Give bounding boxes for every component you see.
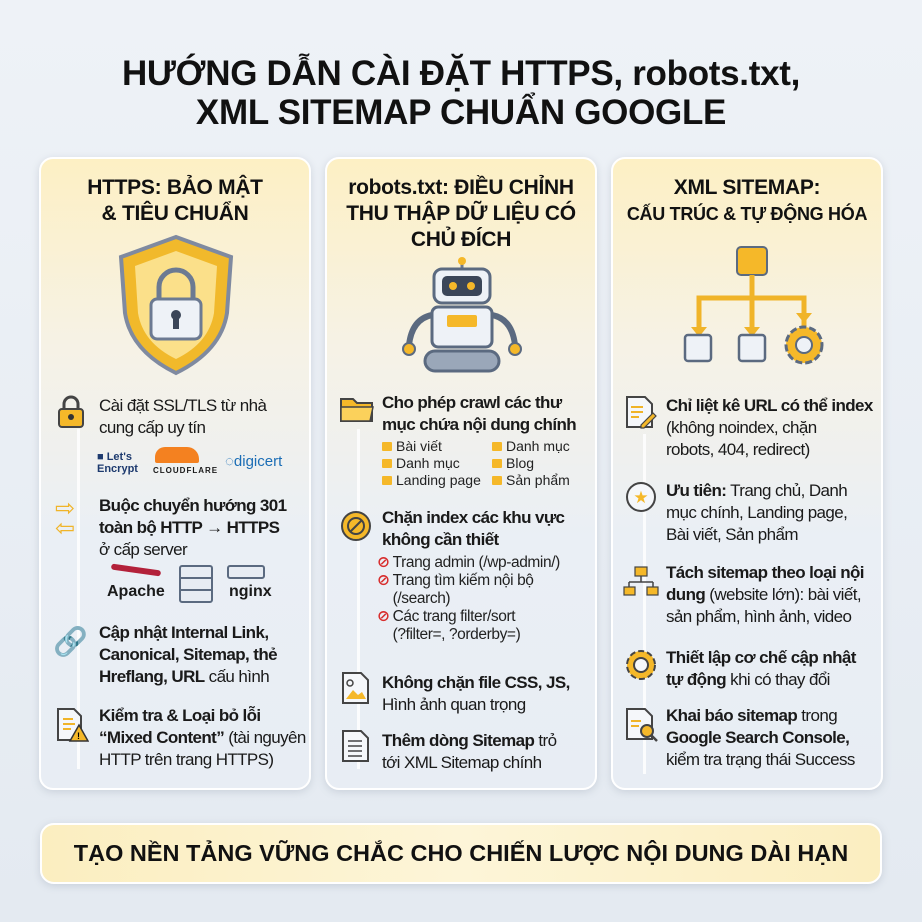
logos: servers: nginx — [229, 583, 272, 600]
text: allow crawl: mục chứa nội dung chính — [382, 415, 576, 434]
text: internal link: Canonical, Sitemap, thẻ — [99, 645, 277, 664]
icon: redirect arrows: ⇨ — [55, 495, 75, 522]
text: priority: Bài viết, Sản phẩm — [666, 525, 798, 544]
text: index urls — [666, 396, 874, 459]
text: index urls: Chỉ liệt kê URL có thể index — [666, 396, 873, 415]
text: redirect: ở cấp server — [99, 540, 187, 559]
icon: star — [626, 482, 656, 512]
title: HƯỚNG DẪN CÀI ĐẶT HTTPS, robots.txt, — [122, 54, 800, 93]
text: mixed content: HTTP trên trang HTTPS) — [99, 750, 273, 769]
banner: footer: TẠO NỀN TẢNG VỮNG CHẮC CHO CHIẾN LƯỢC NỘI DUNG DÀI HẠN — [74, 840, 848, 866]
text: index urls: (không noindex, chặn — [666, 418, 817, 437]
text: mixed content: “Mixed Content” (tài nguyên — [99, 728, 306, 747]
text: search console: Khai báo sitemap trong — [666, 706, 837, 725]
icon: doc warning: ! — [77, 731, 80, 741]
list: blocked: ⊘Trang tìm kiếm nội bộ — [377, 572, 534, 589]
text: redirect — [99, 496, 287, 559]
panel: https — [39, 157, 311, 790]
text: block index: Chặn index các khu vực — [382, 508, 564, 527]
icon: lock — [58, 396, 84, 428]
icon: block — [341, 511, 371, 541]
list: allowed folders — [382, 438, 570, 488]
heading: robots — [346, 174, 576, 251]
icon: gear — [626, 650, 656, 680]
logos: ssl providers: Encrypt — [97, 463, 138, 475]
icon: link: 🔗 — [53, 626, 88, 657]
heading: sitemap: XML SITEMAP: — [674, 176, 820, 199]
text: css js: Hình ảnh quan trọng — [382, 695, 526, 714]
text: search console: Google Search Console, — [666, 728, 849, 747]
text: split sitemap: Tách sitemap theo loại nội — [666, 563, 864, 582]
list: blocked: (?filter=, ?orderby=) — [393, 626, 520, 643]
heading: robots: CHỦ ĐÍCH — [411, 228, 511, 251]
heading: robots: THU THẬP DỮ LIỆU CÓ — [346, 202, 576, 225]
panel: robots: Blog — [506, 455, 534, 471]
icon: shield — [118, 234, 234, 376]
text: sitemap line: Thêm dòng Sitemap trỏ — [382, 731, 556, 750]
heading: robots: robots.txt: ĐIỀU CHỈNH — [348, 176, 574, 199]
icon: edit doc — [626, 396, 657, 429]
panel: sitemap — [611, 157, 883, 790]
logos: ssl providers: CLOUDFLARE — [153, 466, 218, 475]
text: auto update: Thiết lập cơ chế cập nhật — [666, 648, 856, 667]
heading: https: & TIÊU CHUẨN — [102, 202, 248, 225]
icon: folder — [340, 398, 374, 422]
panel: robots: Sản phẩm — [506, 472, 570, 488]
icon: star: ★ — [633, 488, 649, 507]
text: index urls: robots, 404, redirect) — [666, 440, 810, 459]
panel: robots: Landing page — [396, 472, 481, 488]
icon: image — [342, 672, 369, 704]
icon: hierarchy — [623, 566, 659, 596]
logos: servers: Apache — [107, 583, 165, 600]
text: redirect: toàn bộ HTTP → HTTPS — [99, 518, 279, 537]
icon: sitemap tree — [684, 246, 824, 364]
title: XML SITEMAP CHUẨN GOOGLE — [196, 93, 726, 132]
text: auto update: tự động khi có thay đổi — [666, 670, 830, 689]
heading: sitemap — [627, 176, 867, 224]
icon: doc warning — [57, 708, 89, 742]
logos: ssl providers — [97, 447, 282, 475]
icon: search doc — [626, 708, 658, 742]
list: blocked: ⊘Các trang filter/sort — [377, 608, 515, 625]
logos: ssl providers: ◌digicert — [225, 453, 282, 470]
text: sitemap line — [382, 731, 556, 772]
text: search console: kiểm tra trạng thái Success — [666, 750, 855, 769]
banner: footer — [40, 823, 882, 884]
text: sitemap line: tới XML Sitemap chính — [382, 753, 542, 772]
list: blocked — [377, 554, 560, 643]
panel: robots: Bài viết — [396, 438, 442, 454]
text: block index — [382, 508, 564, 549]
panel: robots — [325, 157, 597, 790]
text: allow crawl — [382, 393, 576, 434]
icon: list doc — [342, 730, 369, 762]
text: priority: Ưu tiên: Trang chủ, Danh — [666, 481, 847, 500]
list: blocked: ⊘Trang admin (/wp-admin/) — [377, 554, 560, 571]
text: split sitemap: dung (website lớn): bài viết, — [666, 585, 861, 604]
text: mixed content — [99, 706, 306, 769]
panel: robots: Danh mục — [506, 438, 570, 454]
text: block index: không cần thiết — [382, 530, 499, 549]
text: ssl: cung cấp uy tín — [99, 418, 205, 437]
text: css js: Không chặn file CSS, JS, — [382, 673, 570, 692]
heading: https — [87, 174, 263, 225]
text: search console — [666, 706, 855, 769]
text: internal link: Hreflang, URL cấu hình — [99, 667, 269, 686]
text: split sitemap — [666, 563, 864, 626]
heading: https: HTTPS: BẢO MẬT — [87, 176, 263, 199]
heading: sitemap: CẤU TRÚC & TỰ ĐỘNG HÓA — [627, 204, 867, 224]
text: auto update — [666, 648, 856, 689]
icon: redirect arrows: ⇦ — [55, 515, 75, 542]
logos: ssl providers: ■ Let's — [97, 451, 132, 463]
title — [122, 54, 800, 132]
text: internal link: Cập nhật Internal Link, — [99, 623, 268, 642]
icon: redirect arrows — [55, 495, 75, 542]
icon: robot — [402, 257, 522, 372]
text: allow crawl: Cho phép crawl các thư — [382, 393, 562, 412]
text: redirect: Buộc chuyển hướng 301 — [99, 496, 286, 515]
text: ssl: Cài đặt SSL/TLS từ nhà — [99, 396, 266, 415]
text: ssl — [99, 396, 267, 437]
list: blocked: (/search) — [393, 590, 450, 607]
text: priority: mục chính, Landing page, — [666, 503, 847, 522]
text: internal link — [99, 623, 277, 686]
text: priority — [666, 481, 847, 544]
logos: servers — [107, 564, 272, 603]
text: mixed content: Kiểm tra & Loại bỏ lỗi — [99, 706, 261, 725]
text: css js — [382, 673, 570, 714]
text: split sitemap: sản phẩm, hình ảnh, video — [666, 607, 851, 626]
panel: robots: Danh mục — [396, 455, 460, 471]
